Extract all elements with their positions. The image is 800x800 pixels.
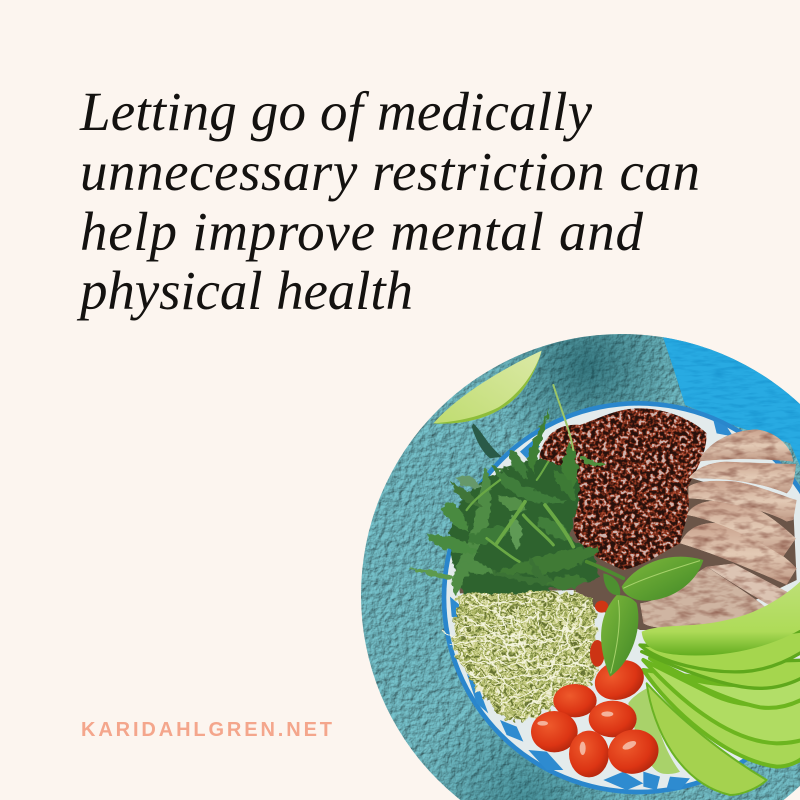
cherry tomatoes: [531, 601, 663, 778]
title: [76, 81, 700, 321]
quinoa: [540, 408, 707, 570]
blue napkin: [662, 333, 800, 473]
website credit: KARIDAHLGREN.NET: [81, 719, 332, 741]
avocado wedge on the table: [433, 351, 542, 458]
behind avocado slice: [628, 687, 680, 774]
basil leaves: [601, 557, 703, 677]
circular food photo: [357, 327, 800, 800]
title: physical health: [76, 260, 413, 321]
arugula: [409, 385, 623, 595]
title: unnecessary restriction can: [80, 141, 700, 202]
food underlay: [450, 473, 797, 630]
sprouts: [443, 589, 598, 721]
avocado slices: [640, 575, 800, 795]
title: Letting go of medically: [79, 81, 593, 142]
title: help improve mental and: [80, 201, 644, 262]
textured teal surface: [357, 327, 800, 800]
plate: [442, 401, 800, 794]
chicken slices: [640, 429, 797, 628]
